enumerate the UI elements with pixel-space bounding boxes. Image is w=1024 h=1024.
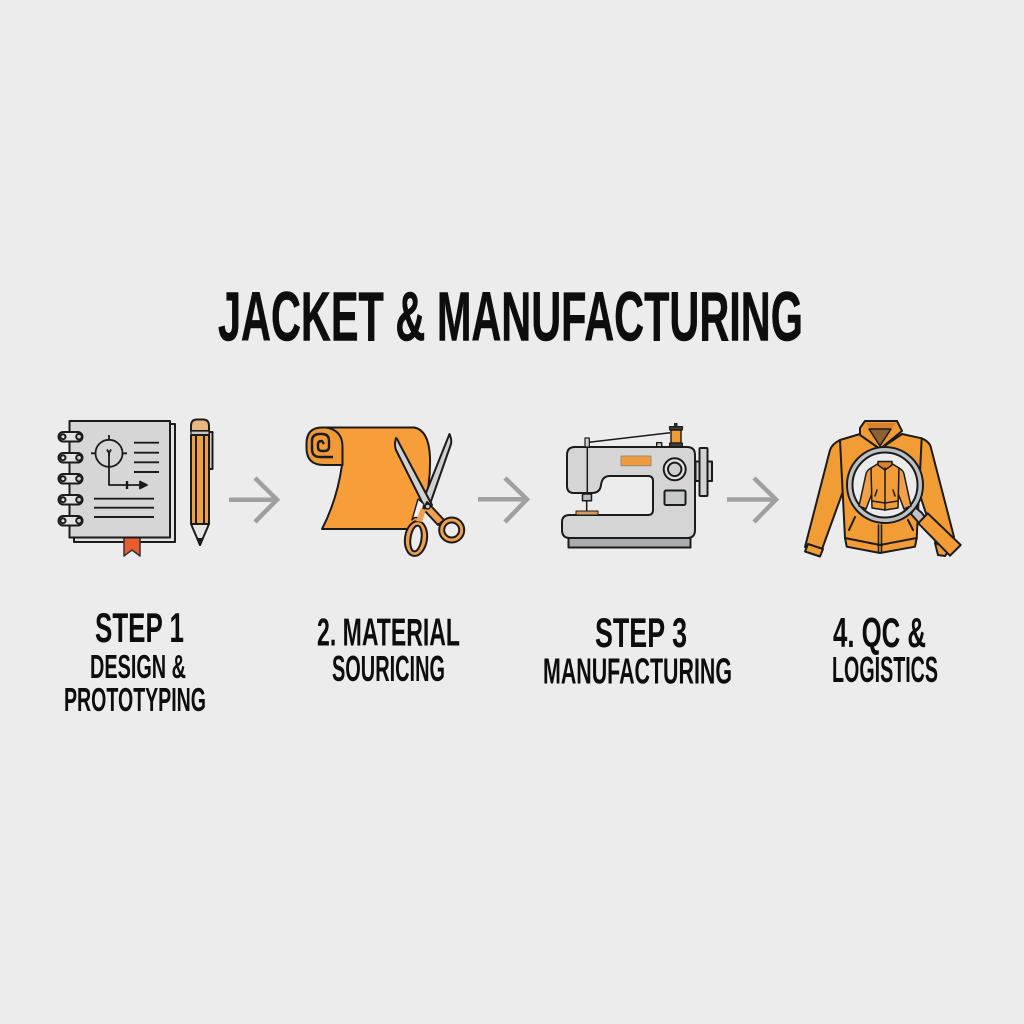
icon: sewing machine (562, 424, 712, 548)
mini jacket in lens (859, 462, 911, 510)
left cuff (805, 544, 823, 556)
label: step 2 (317, 612, 460, 689)
label: step 1: DESIGN & (90, 648, 186, 685)
technical sketch (91, 435, 147, 489)
label: step 2: 2. MATERIAL (317, 612, 460, 654)
spool (657, 424, 682, 447)
dial (664, 458, 686, 480)
handwheel (696, 448, 712, 496)
label: step 3: MANUFACTURING (543, 650, 732, 692)
label: step 1 (64, 604, 206, 718)
jacket body (840, 434, 922, 553)
small control panel (664, 490, 686, 505)
notebook back page (74, 424, 175, 542)
label: step 3: STEP 3 (595, 609, 687, 656)
notebook front page (70, 421, 170, 538)
machine body (562, 447, 695, 538)
magnifier handle (911, 507, 961, 556)
arrow 2 (478, 478, 527, 522)
label: step 4: LOGISTICS (832, 649, 938, 690)
icon: jacket under magnifying glass (805, 421, 961, 556)
icon: notebook and pencil (58, 420, 212, 556)
icon: fabric roll and scissors (306, 428, 464, 557)
base plate (568, 538, 690, 548)
thread (589, 433, 670, 442)
zipper and hem (845, 538, 917, 545)
roll spiral (312, 434, 333, 457)
bookmark (124, 537, 140, 556)
orange panel (621, 456, 651, 466)
spiral rings (58, 432, 82, 526)
label: step 1: PROTOTYPING (64, 681, 206, 718)
magnifier lens (847, 447, 923, 523)
needle assembly (576, 438, 598, 515)
left sleeve (805, 440, 846, 552)
right cuff (935, 543, 950, 556)
scissors (395, 434, 464, 557)
pencil (191, 420, 212, 545)
label: step 4: 4. QC & (833, 609, 926, 656)
label: step 4 (832, 609, 938, 690)
notes lines (94, 443, 159, 517)
label: step 1: STEP 1 (95, 604, 184, 651)
label: step 2: SOURICING (332, 648, 445, 689)
arrow 3 (727, 478, 776, 522)
label: step 3 (543, 609, 732, 692)
collar (860, 421, 902, 449)
fabric roll (306, 428, 342, 465)
right sleeve (916, 438, 954, 550)
fabric sheet (322, 428, 430, 529)
arrow 1 (229, 478, 277, 522)
